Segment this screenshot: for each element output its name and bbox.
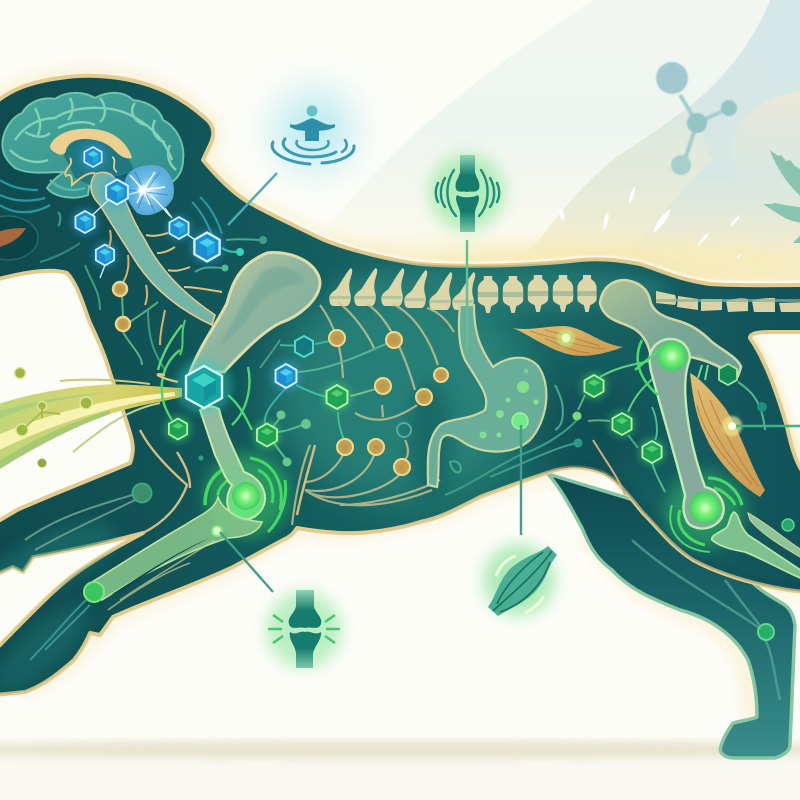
leg tendons <box>632 540 780 700</box>
stomach <box>428 305 546 487</box>
cerebellum <box>125 165 174 216</box>
small dorsal muscle <box>513 326 623 356</box>
brain folds <box>10 98 176 190</box>
leg node <box>758 624 774 640</box>
upper foreleg bone <box>200 406 289 537</box>
line: mental state callout <box>228 173 277 225</box>
icon: calm figure with ripples <box>272 90 354 170</box>
far hind leg <box>548 474 795 758</box>
line: joint callout <box>220 532 273 592</box>
pale orb behind leaf <box>733 92 800 225</box>
neck nerves <box>85 230 267 370</box>
stream molecules <box>14 368 92 468</box>
line: muscle callout <box>736 425 800 427</box>
body inner shading <box>0 268 800 706</box>
pelvis <box>600 280 741 376</box>
gold body nodes <box>329 330 448 475</box>
joint glow rings <box>205 458 286 532</box>
ribs <box>292 302 454 525</box>
brainstem and spinal cord <box>91 172 215 325</box>
connector lines <box>220 173 800 592</box>
shoulder blade <box>190 253 320 372</box>
body hexagons <box>165 336 737 465</box>
ground band <box>0 738 800 800</box>
inner brain core <box>62 137 135 186</box>
spine vertebrae <box>329 268 800 313</box>
gold nerve <box>65 158 95 185</box>
dog body silhouette <box>0 76 800 695</box>
gold neck nodes <box>113 282 130 331</box>
knee glow rings <box>670 478 742 552</box>
line: spine callout <box>466 240 468 350</box>
corpus callosum <box>50 129 132 158</box>
stomach dots <box>480 368 539 438</box>
icon: cannabis leaf <box>763 150 800 243</box>
femur and hip joint <box>635 339 745 552</box>
line: stomach callout <box>520 425 522 535</box>
ear <box>0 216 38 260</box>
central shoulder hexagon <box>176 358 232 414</box>
neural hexagon network <box>72 144 223 278</box>
icon: muscle fibre <box>483 544 557 616</box>
lower foreleg bone <box>30 497 262 660</box>
decorative white sparks <box>560 186 741 259</box>
icon: knee joint <box>266 590 342 668</box>
brain <box>2 93 215 325</box>
icon: molecule blurred <box>656 62 737 175</box>
ingested compound stream <box>0 368 182 472</box>
far foreleg node and tendons <box>25 484 152 550</box>
small green nodes <box>198 402 767 466</box>
vascular network lines <box>260 340 765 495</box>
thigh muscle <box>690 373 765 497</box>
leg inner gold lines <box>140 430 315 533</box>
lower hind bone <box>712 512 800 580</box>
icon: spine joint with signal <box>429 154 505 232</box>
panel: upper right sky layers <box>310 0 800 290</box>
neck and face streaks <box>0 180 222 262</box>
green arcs around shoulder <box>158 325 252 430</box>
